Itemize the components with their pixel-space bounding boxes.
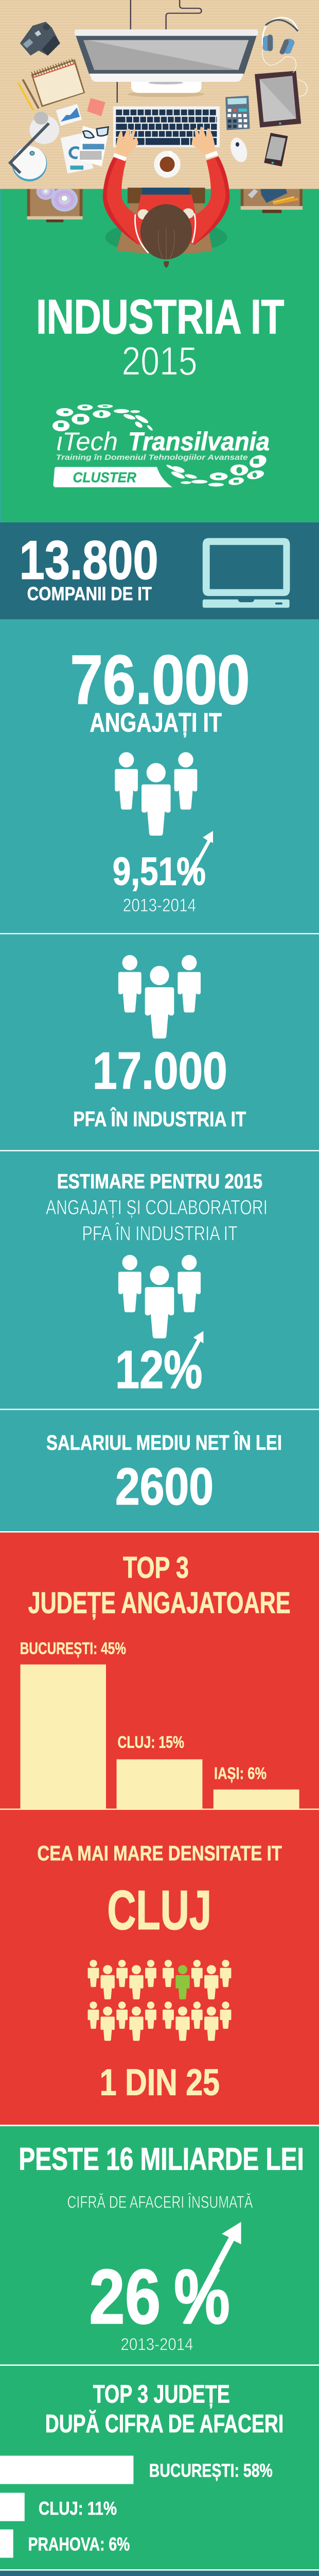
heading: ESTIMARE PENTRU 2015: [57, 1171, 262, 1193]
cables: [117, 0, 201, 103]
panel: dark outsourcing, markets, technologies: [0, 2571, 319, 2576]
logo cluster badge: CLUSTER: [73, 469, 137, 485]
bar: Iasi: IAȘI: 6%: [214, 1764, 267, 1783]
subheading: CIFRĂ DE AFACERI ÎNSUMATĂ: [67, 2192, 253, 2211]
torso: [137, 195, 197, 243]
chair back and jeans: [128, 188, 205, 212]
sticky note: [87, 98, 105, 116]
label: employees: ANGAJAȚI IT: [90, 708, 222, 738]
headphones on neck: [135, 208, 196, 253]
arrow: growth: [170, 1331, 203, 1388]
calculator: [225, 96, 250, 130]
illustration: developer at desk: [0, 0, 319, 268]
period: 2013-2014: [120, 2335, 193, 2354]
left arm: [103, 157, 155, 245]
right drawer: [241, 188, 303, 213]
stat: average salary: [46, 1431, 282, 1516]
coffee cup: [154, 151, 181, 178]
subheading line 2: PFA ÎN INDUSTRIA IT: [82, 1222, 238, 1245]
number: 17.000: 17.000: [93, 1042, 227, 1100]
icon: laptop: [203, 538, 290, 608]
percent number: 26: [89, 2253, 161, 2340]
bar: Bucuresti: BUCUREȘTI: 58%: [149, 2460, 273, 2481]
papers and glasses: [61, 126, 108, 174]
bar: Bucuresti: [20, 1639, 126, 1809]
panel: red employers: [0, 1533, 319, 2125]
bar: Bucuresti: BUCUREȘTI: 45%: [20, 1639, 126, 1657]
heading: top 3 line 1: TOP 3 JUDEȚE: [93, 2381, 230, 2409]
label: PFA: PFA ÎN INDUSTRIA IT: [73, 1107, 246, 1131]
stat: employees: [70, 641, 250, 916]
stat: PFA: [73, 955, 246, 1131]
phone: [264, 133, 288, 166]
value: 2600: [115, 1458, 214, 1516]
stat: estimate 2015: [46, 1171, 268, 1400]
ratio: 1 DIN 25: [100, 2062, 220, 2104]
left drawer: [27, 183, 83, 222]
left edge stripe: [0, 189, 1, 522]
camera: [20, 22, 60, 56]
panel: green turnover: [0, 2126, 319, 2570]
icon: people grid, one highlighted: [88, 1960, 231, 2041]
heading line 1: TOP 3: [123, 1551, 189, 1585]
percent sign: %: [174, 2253, 230, 2340]
bar chart: turnover: [0, 2455, 273, 2558]
label: companies: COMPANII DE IT: [27, 583, 152, 604]
person: [103, 127, 229, 268]
bar: Prahova: [0, 2530, 130, 2558]
number: 76.000: 76.000: [70, 641, 250, 719]
icon: three people: [118, 955, 201, 1039]
chair seat: [105, 202, 227, 254]
logo name: iTech: ιTech: [57, 427, 118, 456]
logo name: Transilvania: Transilvania: [128, 427, 270, 456]
logo subtitle: Training în Domeniul Tehnologiilor Avansate: [56, 453, 248, 462]
photo card: [56, 104, 82, 126]
bar: Iasi: [214, 1764, 299, 1809]
panel: employees and PFA teal background: [0, 619, 319, 1532]
left hand: [116, 129, 138, 157]
keyboard: [113, 106, 220, 147]
number: 13.800: 13.800: [20, 530, 158, 590]
bar: Cluj: [0, 2493, 117, 2521]
logo: iTech Transilvania Cluster: [52, 404, 270, 487]
headphones: [262, 18, 298, 73]
desk surface: [0, 0, 319, 189]
logo orbit dots: [52, 404, 268, 486]
bar: Bucuresti: [0, 2455, 273, 2484]
growth percent: 9,51%: [113, 850, 206, 894]
right arm: [178, 157, 229, 245]
period: 2013-2014: [123, 895, 196, 916]
icon: three people: [118, 1255, 201, 1338]
bar: Prahova: PRAHOVA: 6%: [28, 2533, 130, 2554]
bar chart: top counties: [0, 1639, 319, 1810]
arrow: growth: [183, 831, 213, 885]
monitor: [75, 29, 258, 97]
pencils: [18, 79, 39, 110]
notebook: [31, 59, 85, 107]
bar: Cluj: CLUJ: 11%: [39, 2498, 117, 2519]
icon: three people: [115, 752, 197, 836]
desk lamp: [10, 112, 59, 181]
right hand: [191, 127, 215, 155]
tablet: [255, 71, 307, 127]
hair: [140, 204, 192, 268]
bar: Cluj: [117, 1733, 202, 1809]
percent: 12%: [115, 1340, 202, 1400]
arrow: growth: [183, 2222, 241, 2324]
panel: companies: [0, 522, 319, 619]
bar: Cluj: CLUJ: 15%: [117, 1733, 184, 1752]
mouse: [228, 136, 250, 164]
year: 2015: [121, 338, 198, 383]
panel: hero green background: [0, 0, 319, 522]
value: Cluj: CLUJ: [107, 1878, 211, 1941]
cuffs: [113, 151, 218, 161]
logo cluster badge: [54, 467, 172, 487]
